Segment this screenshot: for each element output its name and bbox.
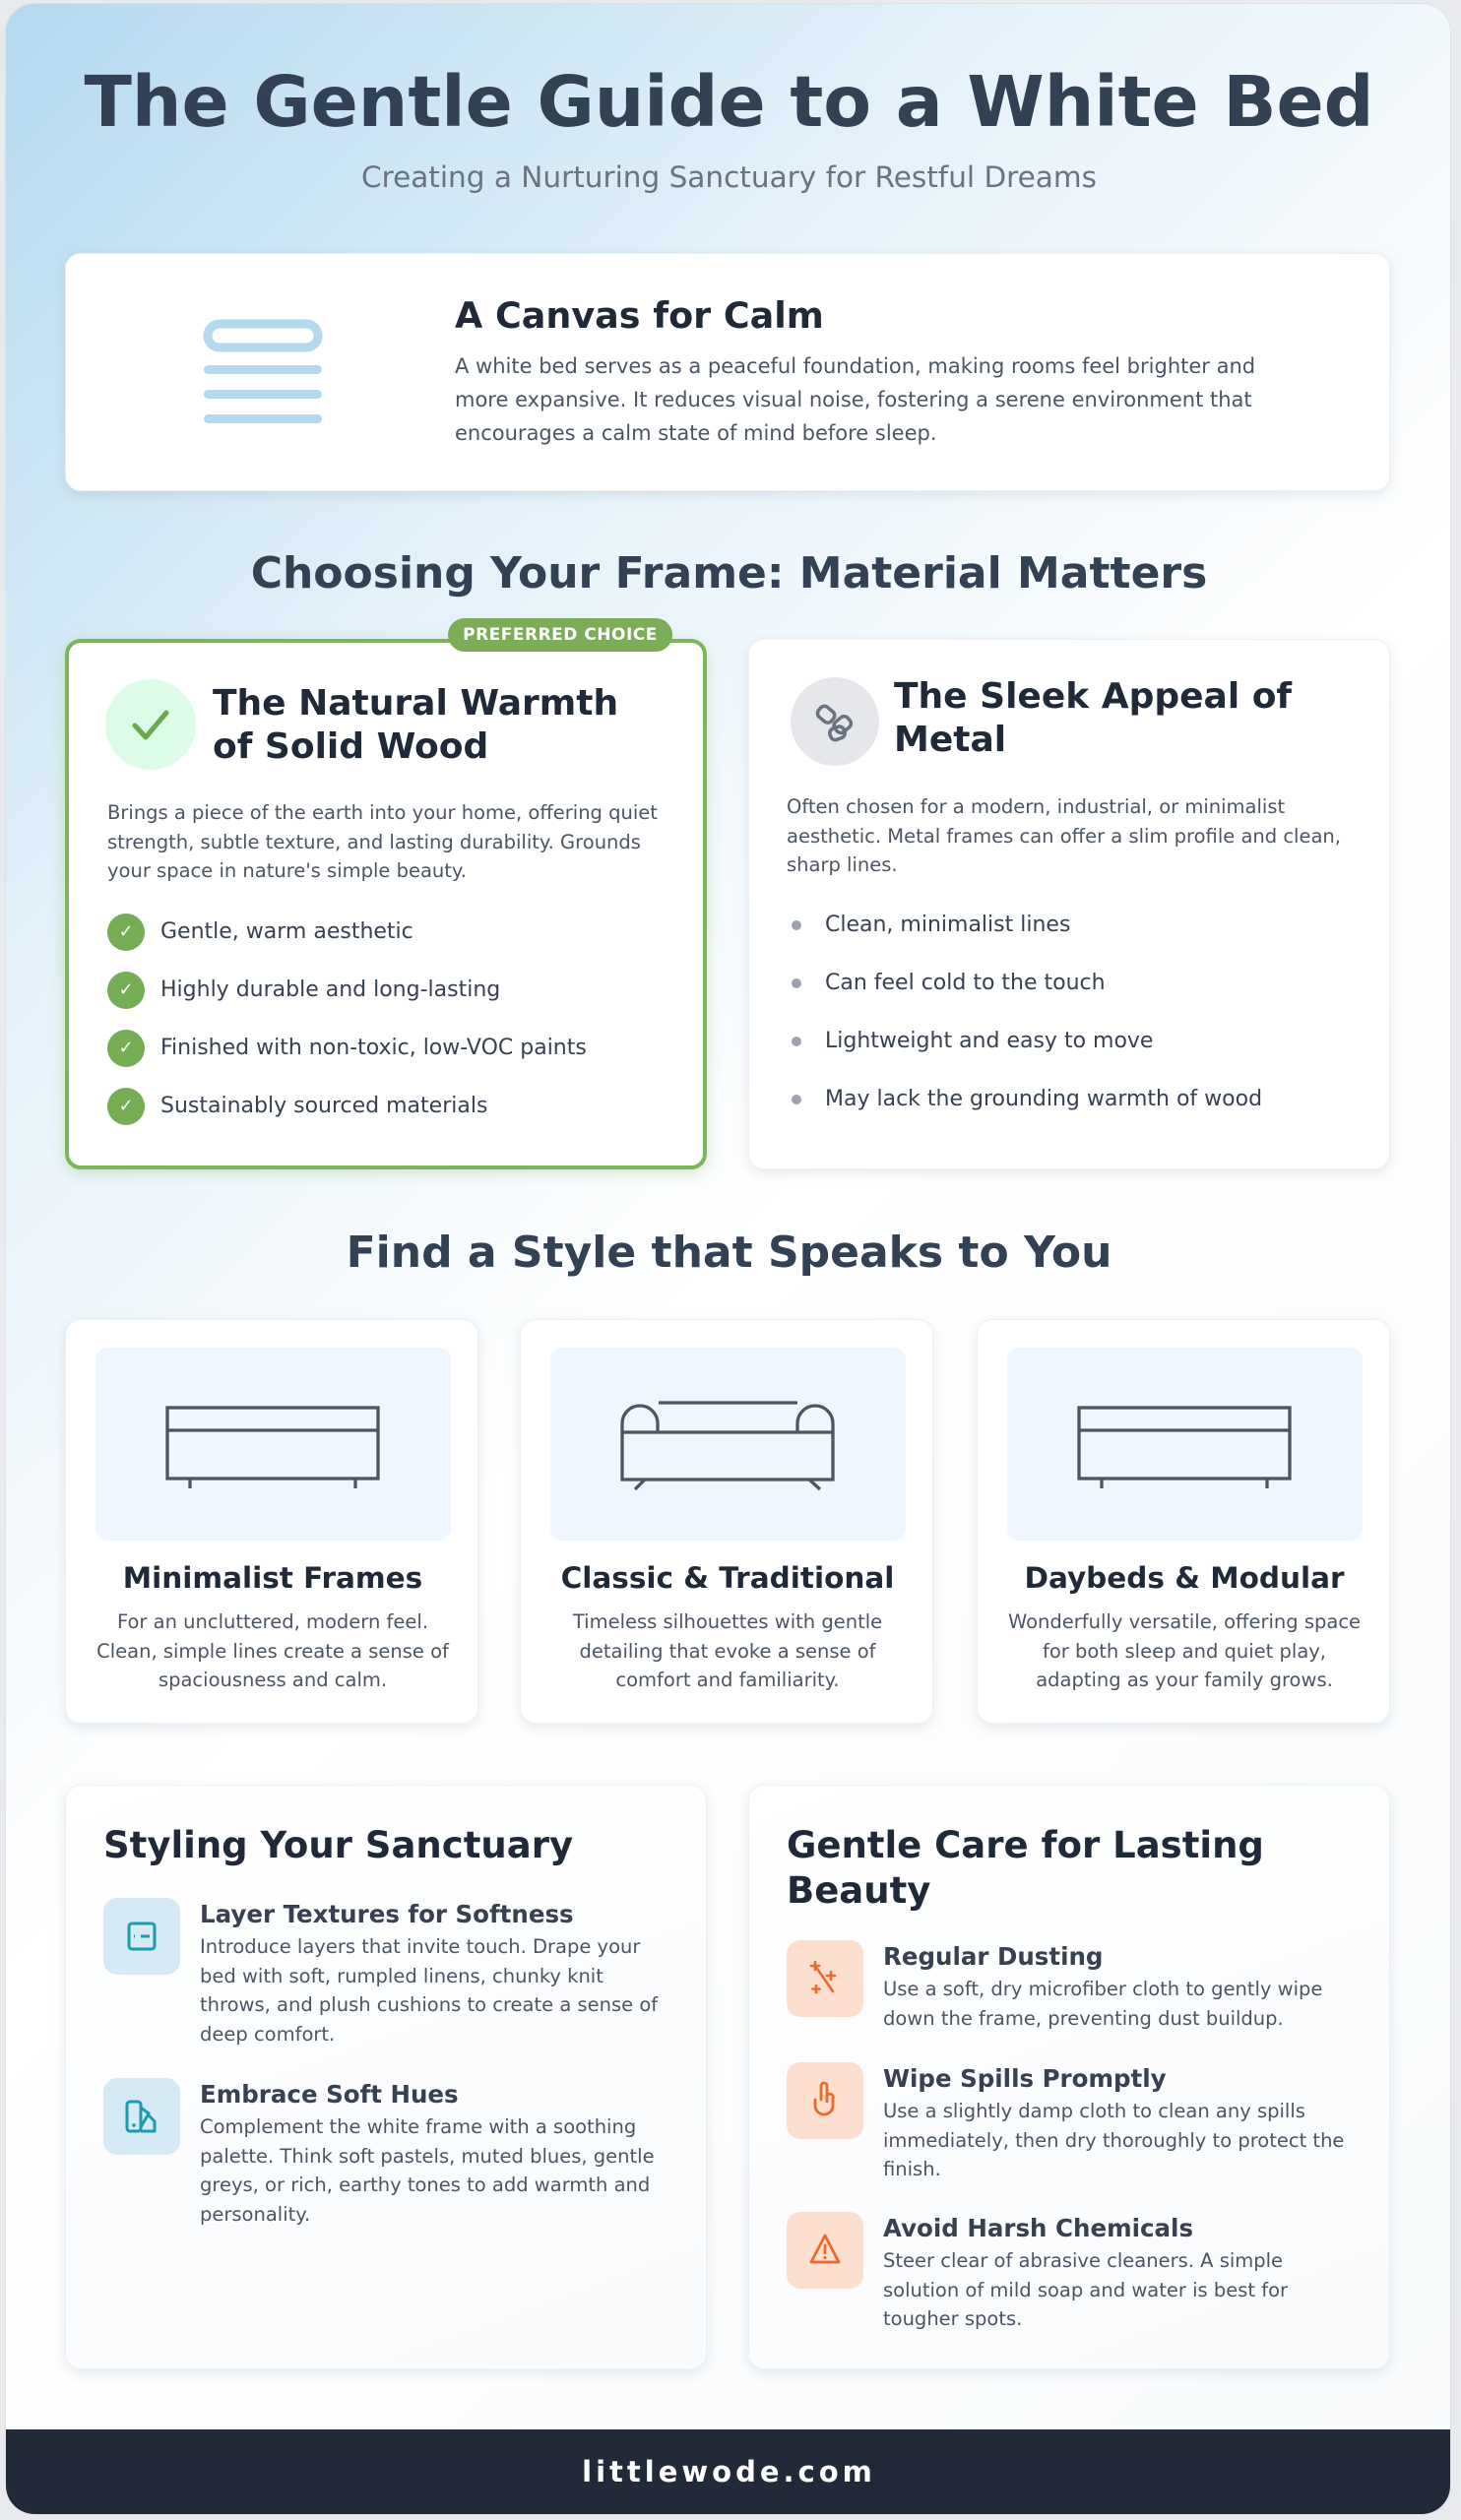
item: harsh chemicals	[787, 2212, 1288, 2330]
badge: preferred choice	[448, 618, 672, 652]
item: wipe spills: Use a slightly damp cloth to clean any spills immediately, then dry thoroughly to protect the finish.	[883, 2100, 1344, 2180]
panel: classic	[520, 1319, 933, 1724]
title: Classic & Traditional	[561, 1561, 894, 1595]
item: soft hues	[103, 2078, 655, 2225]
item: dusting	[787, 1940, 1322, 2030]
icon: sparkle	[787, 1940, 863, 2017]
list: ✓	[118, 921, 134, 942]
text: Wonderfully versatile, offering space for both sleep and quiet play, adapting as your family grows.	[1008, 1610, 1361, 1691]
list	[107, 914, 587, 1125]
text: Brings a piece of the earth into your home, offering quiet strength, subtle texture, and lasting durability. Grounds your space in nature's simple beauty.	[107, 801, 658, 882]
icon: warning	[787, 2212, 863, 2289]
text: Often chosen for a modern, industrial, or minimalist aesthetic. Metal frames can offer a slim profile and clean, sharp lines.	[787, 795, 1341, 876]
list: ✓	[118, 1096, 134, 1116]
badge: preferred choice: PREFERRED CHOICE	[463, 625, 658, 645]
item: soft hues: Complement the white frame with a soothing palette. Think soft pastels, muted blues, gentle greys, or rich, earthy tones to add warmth and personality.	[200, 2115, 655, 2225]
item: layer textures: Introduce layers that invite touch. Drape your bed with soft, rumpled linens, chunky knit throws, and plush cushions to create a sense of deep comfort.	[200, 1935, 658, 2046]
list: ✓	[118, 979, 134, 1000]
item: wipe spills	[787, 2062, 1344, 2180]
list: ✓	[118, 1038, 134, 1058]
list: Can feel cold to the touch	[825, 971, 1106, 995]
heading: Gentle Care for Lasting Beauty	[787, 1824, 1264, 1912]
list: Highly durable and long-lasting	[160, 977, 500, 1002]
item: wipe spills: Wipe Spills Promptly	[883, 2064, 1167, 2093]
list: Sustainably sourced materials	[160, 1094, 487, 1118]
heading: find a style: Find a Style that Speaks to You	[347, 1228, 1112, 1278]
icon: check circle	[105, 679, 196, 770]
item: soft hues: Embrace Soft Hues	[200, 2080, 459, 2109]
panel: gentle care	[748, 1785, 1390, 2369]
text: Timeless silhouettes with gentle detailing that evoke a sense of comfort and familiarity.	[573, 1610, 882, 1691]
panel: canvas for calm	[65, 253, 1390, 491]
list: Gentle, warm aesthetic	[160, 919, 413, 944]
list: Finished with non-toxic, low-VOC paints	[160, 1036, 587, 1060]
item: harsh chemicals: Avoid Harsh Chemicals	[883, 2214, 1193, 2242]
item: layer textures: Layer Textures for Softness	[200, 1900, 574, 1928]
item: harsh chemicals: Steer clear of abrasive cleaners. A simple solution of mild soap and water is best for tougher spots.	[883, 2249, 1288, 2330]
icon: texture	[103, 1898, 180, 1975]
title: Minimalist Frames	[123, 1561, 422, 1595]
panel: metal	[748, 639, 1390, 1169]
icon: swatches	[103, 2078, 180, 2155]
heading: A Canvas for Calm	[455, 294, 824, 337]
list: May lack the grounding warmth of wood	[825, 1087, 1262, 1111]
list: Lightweight and easy to move	[825, 1029, 1153, 1053]
panel: daybeds	[977, 1319, 1390, 1724]
panel: styling your sanctuary	[65, 1785, 707, 2369]
icon: minimalist bed	[95, 1348, 451, 1541]
text: For an uncluttered, modern feel. Clean, simple lines create a sense of spaciousness and calm.	[96, 1610, 449, 1691]
icon: links	[791, 677, 879, 766]
item: layer textures	[103, 1898, 658, 2046]
icon: daybed	[1007, 1348, 1363, 1541]
heading: Styling Your Sanctuary	[103, 1824, 573, 1866]
text: A white bed serves as a peaceful foundation, making rooms feel brighter and more expansive. It reduces visual noise, fostering a serene environment that encourages a calm state of mind before sleep.	[455, 354, 1255, 445]
item: dusting: Use a soft, dry microfiber cloth to gently wipe down the frame, preventing dust buildup.	[883, 1978, 1322, 2030]
heading: The Sleek Appeal of Metal	[894, 676, 1292, 760]
heading: choosing your frame: Choosing Your Frame: Material Matters	[251, 548, 1207, 598]
list	[792, 913, 1262, 1111]
subtitle: Creating a Nurturing Sanctuary for Restful Dreams	[361, 160, 1097, 194]
title: The Gentle Guide to a White Bed	[85, 61, 1374, 143]
heading: The Natural Warmth of Solid Wood	[213, 683, 618, 767]
list: Clean, minimalist lines	[825, 913, 1070, 937]
icon: bed lines	[203, 319, 323, 423]
item: dusting: Regular Dusting	[883, 1942, 1103, 1971]
footer	[6, 2429, 1452, 2516]
panel: solid wood	[65, 639, 707, 1169]
panel: minimalist frames	[65, 1319, 478, 1724]
footer: littlewode.com	[582, 2455, 876, 2488]
title: Daybeds & Modular	[1024, 1561, 1345, 1595]
icon: classic bed	[550, 1348, 906, 1541]
icon: hand	[787, 2062, 863, 2139]
